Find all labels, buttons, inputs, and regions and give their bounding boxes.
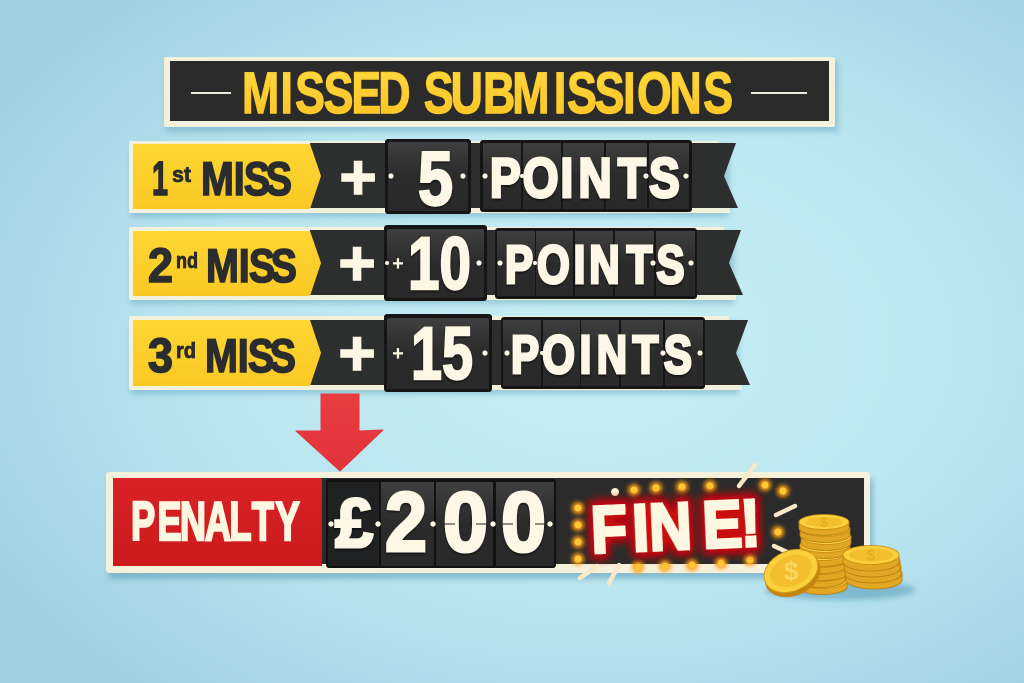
label: 2nd miss: [148, 240, 297, 293]
label: penalty: [113, 478, 322, 566]
label: 3rd miss: rd: [176, 338, 196, 363]
label: 1st miss: st: [172, 162, 192, 187]
label: 1st miss: 1: [152, 153, 168, 206]
label: 1st miss: [152, 153, 292, 206]
number plate: 15: 15: [411, 312, 473, 395]
number plate: 5: 5: [418, 137, 453, 222]
number plate: 10: +: [392, 253, 404, 275]
amount plates: £200: [326, 475, 556, 569]
label: 2nd miss: 2: [148, 240, 173, 293]
amount plates: £200: 0: [443, 475, 488, 569]
word plates: points: POINTS: [505, 235, 684, 295]
label: 3rd miss: 3: [148, 330, 173, 383]
sparkle rays: [580, 465, 795, 583]
heading: fine: FINE!: [589, 486, 762, 568]
coin: leaning: $: [784, 556, 799, 586]
marquee lights: [572, 479, 789, 573]
panel: title banner: [164, 57, 838, 132]
label: 3rd miss: [148, 330, 296, 383]
amount plates: £200: 2: [385, 475, 427, 569]
number plate: 15: +: [392, 343, 404, 365]
heading: title text: MISSED SUBMISSIONS: [242, 60, 733, 125]
word plates: points: POINTS: [511, 325, 692, 385]
amount plates: £200: 0: [501, 475, 546, 569]
number plate: 10: 10: [408, 222, 471, 305]
plus sign: +: [338, 317, 376, 389]
word plates: points: POINTS: [490, 147, 680, 209]
label: 3rd miss: MISS: [205, 331, 296, 383]
arrow: red down arrow: [296, 394, 383, 471]
panel: third miss row: [129, 312, 750, 395]
label: 2nd miss: MISS: [206, 241, 297, 293]
coin stack: tall: $: [820, 514, 828, 530]
plus sign: +: [338, 227, 376, 299]
panel: penalty bar: [106, 465, 873, 583]
label: penalty: PENALTY: [131, 490, 300, 552]
number plate: 5: [385, 137, 471, 222]
coin stack: short: [843, 546, 902, 589]
panel: second miss row: [129, 222, 743, 305]
coin stack: tall: [795, 514, 851, 594]
label: 2nd miss: nd: [176, 248, 198, 273]
coin: leaning: [756, 541, 828, 606]
icon: coin stacks: [756, 514, 915, 606]
coin stack: short: $: [867, 547, 876, 564]
label: 1st miss: MISS: [201, 154, 292, 206]
plus sign: +: [339, 141, 377, 213]
amount plates: £200: £: [335, 484, 373, 562]
panel: first miss row: [129, 137, 738, 222]
